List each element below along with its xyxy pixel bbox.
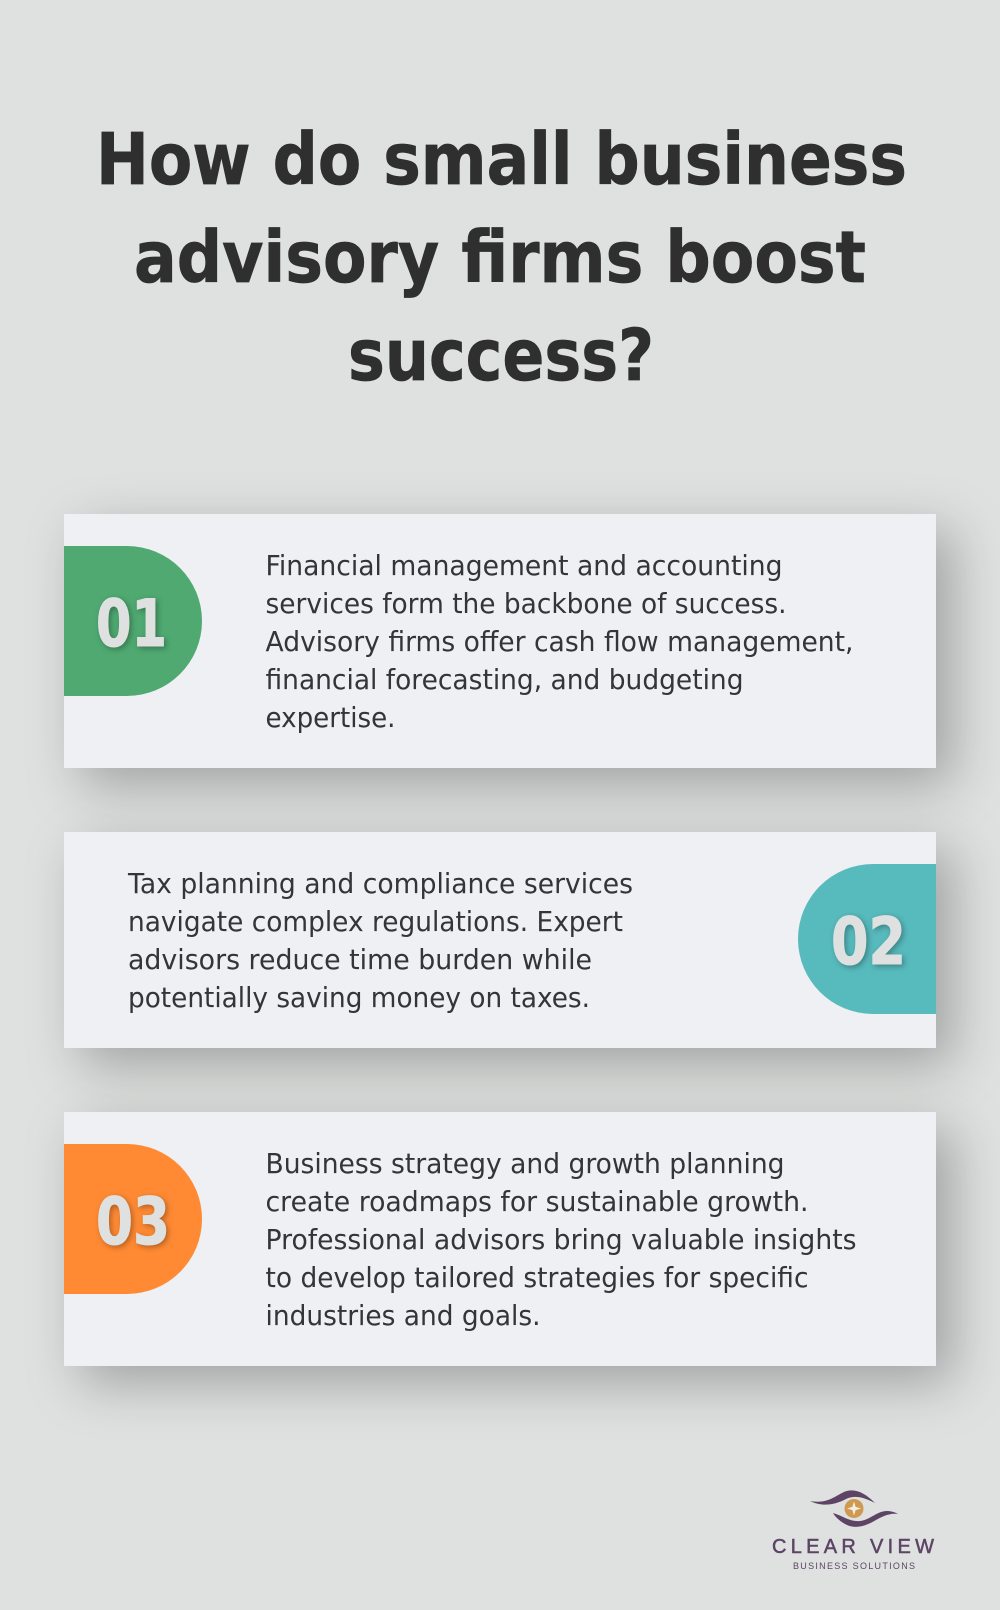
text block: tax planning [127,869,633,1014]
text block: financial management: services form the backbone of success. [266,589,786,620]
badge: 01 [64,546,202,696]
logo: Clear View Business Solutions [772,1490,934,1571]
text block: financial management: financial forecasting, and budgeting [266,665,744,696]
text block: tax planning: potentially saving money on taxes. [128,983,590,1014]
badge: 02 [798,864,936,1014]
text block: financial management: Advisory firms offer cash flow management, [266,627,854,658]
text block: tax planning: Tax planning and compliance services [127,869,633,900]
text block: business strategy: Business strategy and growth planning [266,1149,784,1180]
panel: step 03 business strategy [64,1112,936,1366]
logo tagline: BUSINESS SOLUTIONS [793,1561,915,1571]
panel: step 02 tax planning [64,832,936,1048]
logo wordmark: CLEAR VIEW [772,1536,934,1558]
title [96,118,907,397]
panel: step 01 financial management [64,514,936,768]
text block: tax planning: advisors reduce time burden while [128,945,592,976]
text block: business strategy: industries and goals. [266,1301,540,1332]
text block: business strategy [266,1149,856,1332]
title: How do small business [96,118,907,201]
badge: 02: 02 [831,905,906,980]
badge: 03 [64,1144,202,1294]
icon: eye [810,1490,898,1527]
title: advisory firms boost [134,216,866,299]
text block: business strategy: Professional advisors bring valuable insights [266,1225,856,1256]
text block: financial management [266,551,854,734]
badge: 01: 01 [96,587,167,662]
text block: financial management: expertise. [266,703,396,734]
text block: business strategy: create roadmaps for sustainable growth. [266,1187,808,1218]
text block: financial management: Financial management and accounting [266,551,782,582]
text block: business strategy: to develop tailored strategies for specific [266,1263,808,1294]
text block: tax planning: navigate complex regulations. Expert [128,907,623,938]
badge: 03: 03 [96,1185,170,1260]
title: success? [348,314,654,397]
